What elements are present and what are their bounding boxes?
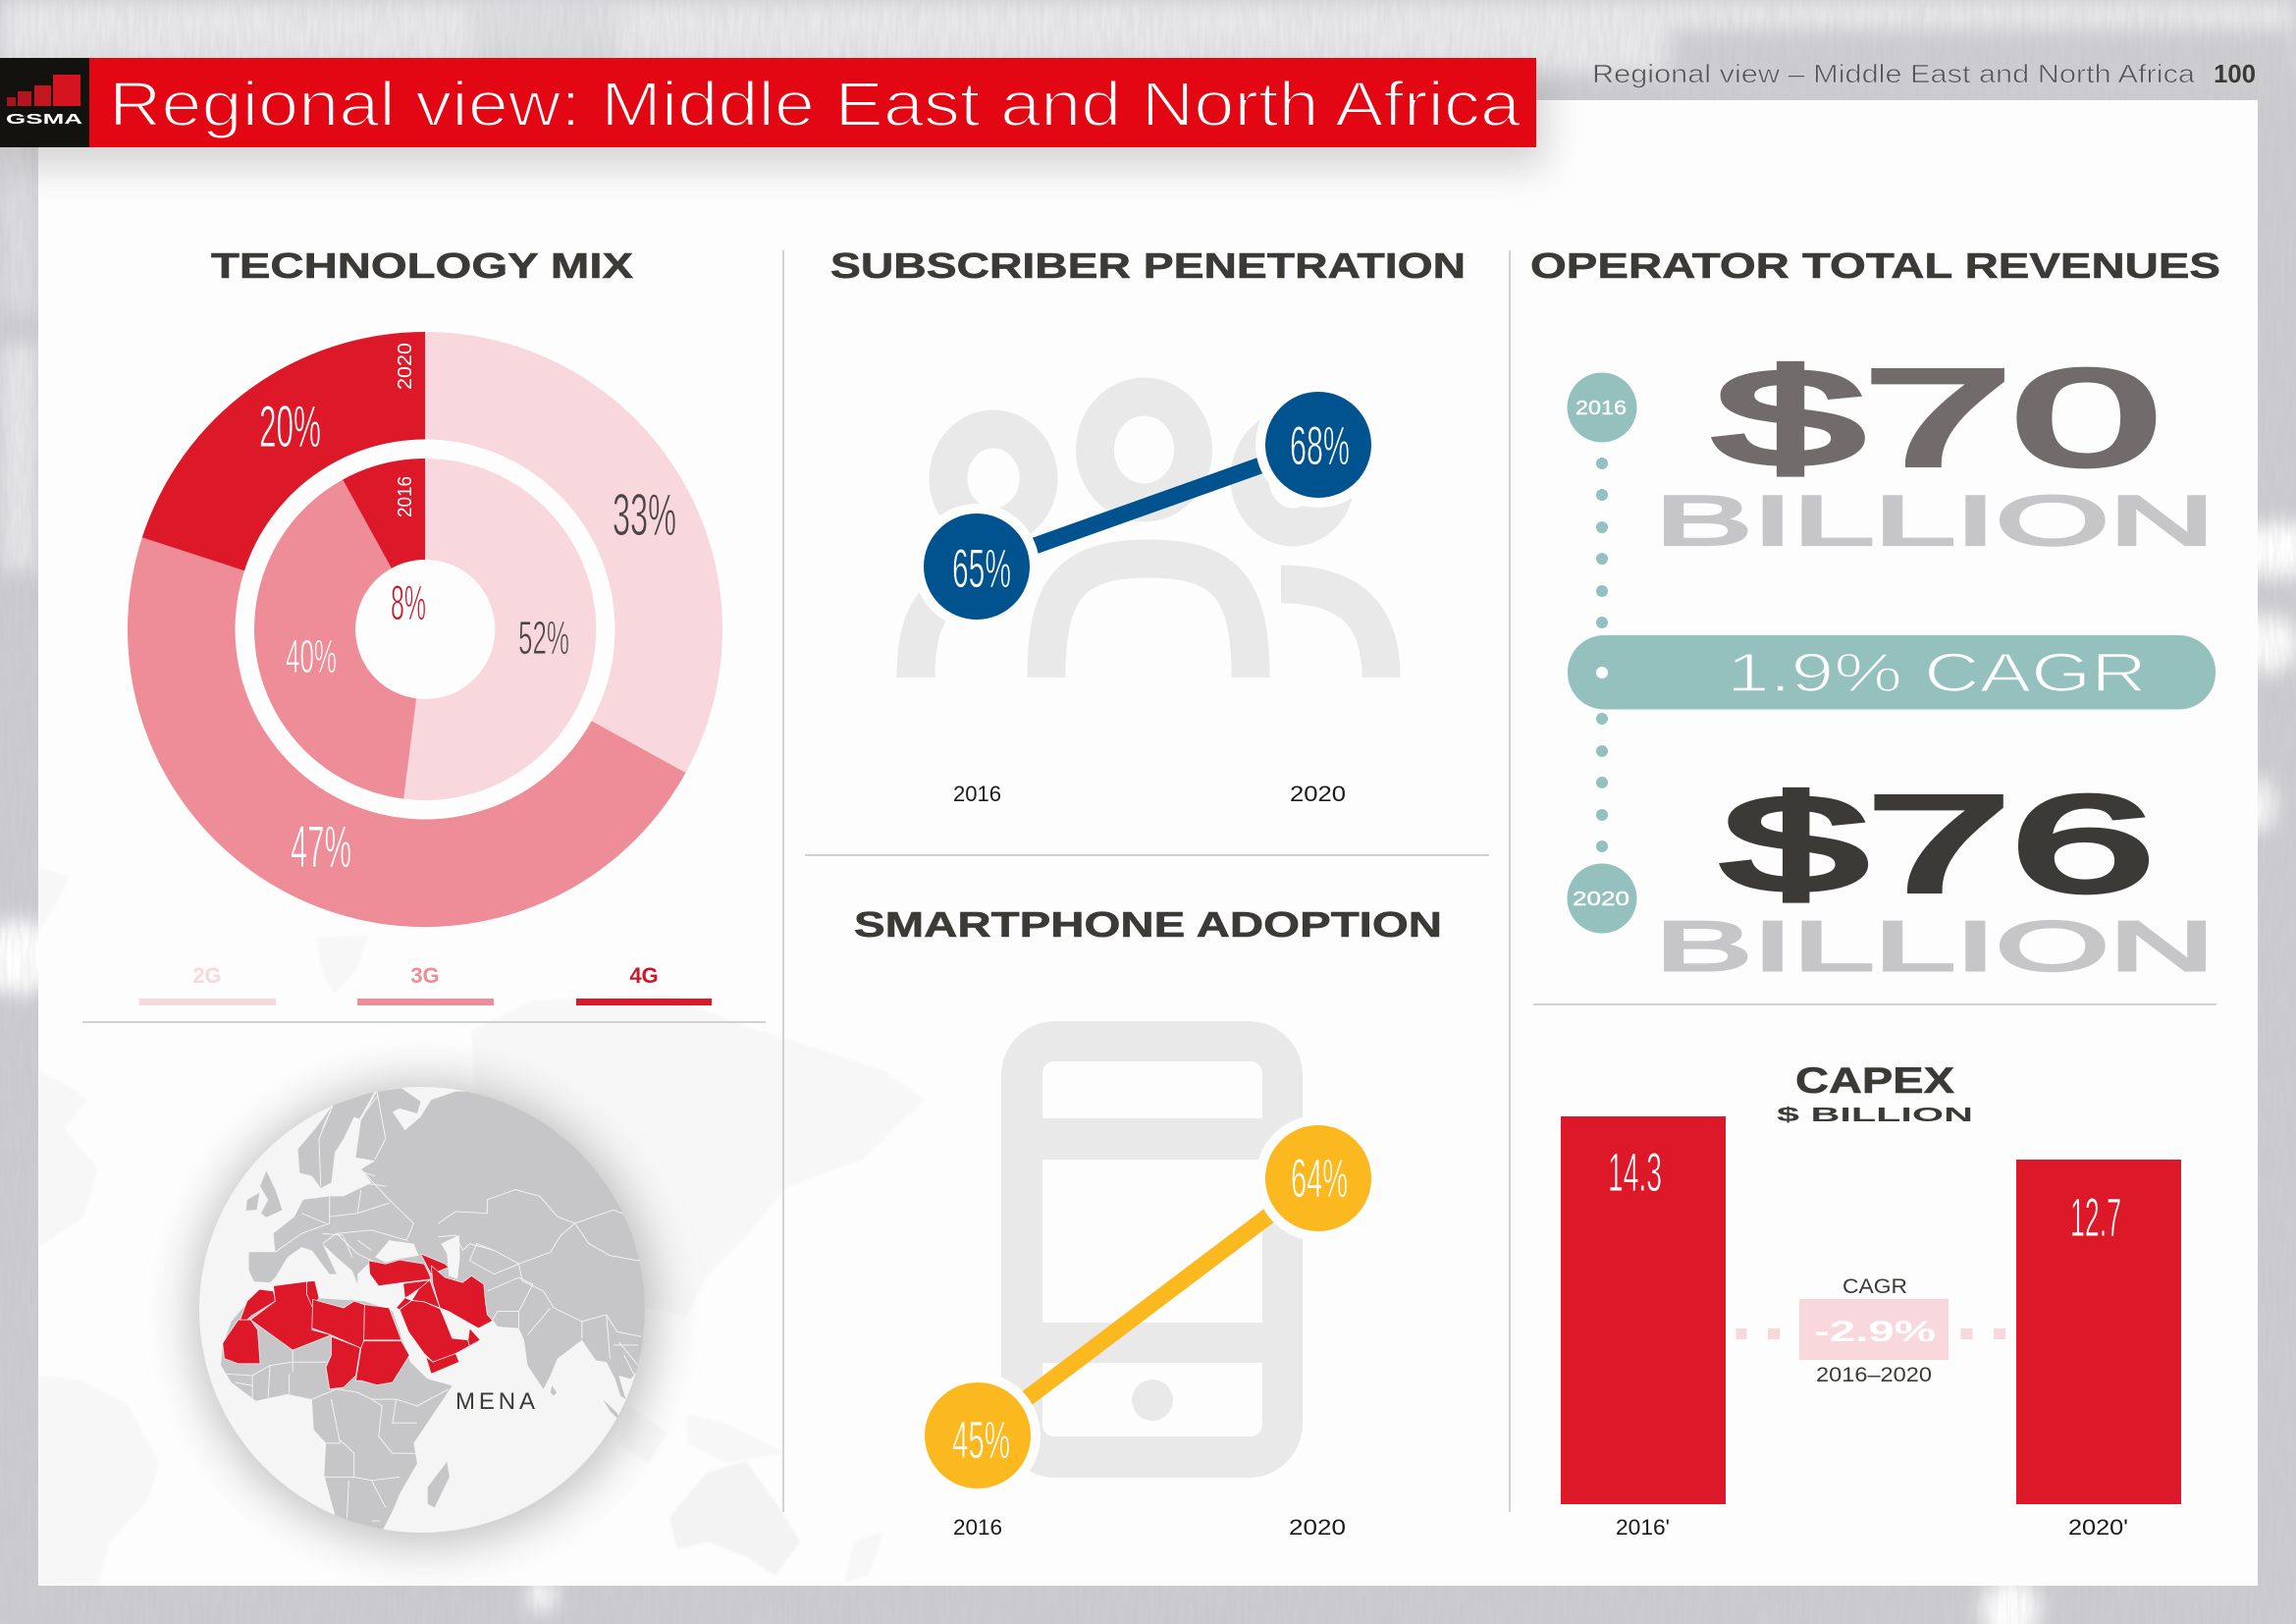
stat: $70 billion — [1655, 343, 2215, 561]
timeline: revenue growth — [1567, 373, 2216, 933]
bar 2016: 14.3 — [1608, 1141, 1662, 1203]
icon: GSMA logo: GSMA — [6, 111, 82, 128]
heading: technology mix: TECHNOLOGY MIX — [211, 245, 633, 286]
outer ring 2020 4G — [142, 332, 425, 570]
highlighted MENA countries — [223, 1254, 493, 1389]
map: MENA globe — [199, 1087, 673, 1542]
faint world map background — [671, 1463, 798, 1574]
legend: technology: 2G — [192, 963, 222, 988]
label: MENA: MENA — [455, 1388, 535, 1415]
legend: technology: 3G — [410, 963, 440, 988]
white country borders — [225, 1092, 673, 1521]
inner ring 2016 4G — [343, 459, 425, 568]
year badge 2020: 2020 — [1573, 889, 1629, 910]
donut chart: technology mix — [128, 332, 722, 927]
heading: subscriber penetration: SUBSCRIBER PENETRATION — [830, 245, 1466, 286]
CAGR callout: CAGR — [1842, 1275, 1907, 1298]
donut value labels: 20% — [259, 394, 321, 460]
line chart: subscriber penetration: 68% — [1290, 414, 1350, 476]
page running header: Regional view – Middle East and North Africa — [1592, 59, 2196, 88]
stat: $76 billion: BILLION — [1655, 908, 2215, 986]
CAGR callout — [1735, 1275, 2005, 1386]
icon: smartphone silhouette — [1001, 1021, 1303, 1478]
heading: capex — [1777, 1060, 1973, 1126]
globe drop shadow — [192, 1082, 656, 1545]
heading: capex: $ BILLION — [1777, 1104, 1973, 1126]
CAGR callout: 2016–2020 — [1816, 1364, 1932, 1386]
line chart: smartphone adoption: 45% — [952, 1411, 1010, 1470]
stat: $76 billion: $76 — [1723, 769, 2155, 920]
stat: $76 billion — [1655, 769, 2215, 986]
bar 2020 — [2016, 1160, 2181, 1540]
year labels in donut: 2020 — [395, 343, 416, 390]
line chart: subscriber penetration — [914, 382, 1381, 806]
stat: $70 billion: BILLION — [1655, 483, 2215, 561]
outer ring 2020 3G — [128, 537, 686, 927]
bar chart: capex — [1561, 1116, 2181, 1540]
inner ring 2016 2G — [403, 459, 596, 800]
line chart: smartphone adoption — [915, 1115, 1381, 1540]
heading: capex: CAPEX — [1795, 1060, 1954, 1101]
year labels in donut — [395, 343, 416, 517]
donut value labels — [259, 394, 676, 880]
page running header: 100 — [2207, 59, 2256, 88]
year labels in donut: 2016 — [395, 476, 416, 517]
year badge 2020 — [1567, 864, 1637, 933]
icon: people silhouette — [916, 397, 1381, 677]
red title bar shadow — [0, 74, 1546, 167]
donut value labels: 52% — [518, 613, 569, 665]
title bar: Regional view: Middle East and North Africa — [109, 69, 1521, 139]
line chart: smartphone adoption: 2016 — [953, 1515, 1002, 1540]
donut value labels: 40% — [286, 631, 337, 683]
bar 2016: 2016' — [1616, 1515, 1670, 1540]
year badge 2016: 2016 — [1575, 398, 1627, 419]
legend: technology: 4G — [629, 963, 659, 988]
stat: $70 billion: $70 — [1715, 343, 2161, 494]
heading: operator total revenues: OPERATOR TOTAL REVENUES — [1530, 245, 2220, 286]
seas — [375, 1235, 460, 1279]
donut value labels: 47% — [291, 814, 351, 880]
CAGR callout: -2.9% — [1814, 1316, 1936, 1348]
donut value labels: 8% — [391, 575, 426, 630]
grey land masses — [221, 1088, 673, 1542]
heading: smartphone adoption: SMARTPHONE ADOPTION — [854, 904, 1442, 945]
line chart: smartphone adoption: 2020 — [1289, 1515, 1346, 1540]
icon: GSMA logo — [0, 58, 89, 147]
line chart: subscriber penetration: 2016 — [953, 782, 1001, 806]
title bar — [0, 58, 1536, 147]
bar 2020: 2020' — [2068, 1515, 2128, 1540]
CAGR pill — [1568, 635, 2216, 709]
bar 2020: 12.7 — [2070, 1186, 2121, 1248]
CAGR pill: 1.9% CAGR — [1727, 641, 2147, 703]
line chart: smartphone adoption: 64% — [1291, 1147, 1348, 1209]
donut value labels: 33% — [613, 482, 676, 548]
legend: technology — [139, 963, 712, 1005]
inner ring 2016 3G — [254, 479, 416, 799]
line chart: subscriber penetration: 65% — [952, 537, 1011, 599]
line chart: subscriber penetration: 2020 — [1290, 782, 1346, 806]
outer ring 2020 2G — [425, 332, 722, 773]
year badge 2016 — [1567, 373, 1637, 442]
bar 2016 — [1561, 1116, 1726, 1540]
